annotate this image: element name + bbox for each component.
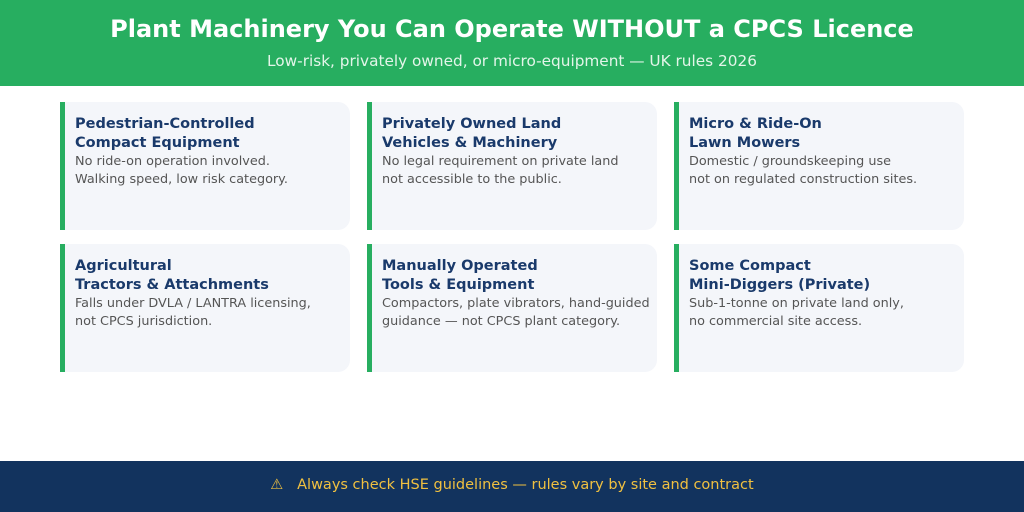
card: lawn mowers: Domestic / groundskeeping use bbox=[689, 154, 891, 169]
card: manual tools: Compactors, plate vibrators, hand-guided bbox=[382, 296, 650, 311]
card: privately owned land bbox=[367, 102, 657, 230]
card: lawn mowers: Lawn Mowers bbox=[689, 135, 800, 151]
card: lawn mowers: Micro & Ride-On bbox=[689, 116, 822, 132]
card: agricultural bbox=[60, 244, 350, 372]
card: agricultural: Agricultural bbox=[75, 258, 172, 274]
card: mini-diggers: Mini-Diggers (Private) bbox=[689, 277, 870, 293]
card: agricultural: Tractors & Attachments bbox=[75, 277, 269, 293]
card: pedestrian-controlled: Pedestrian-Controlled bbox=[75, 116, 255, 132]
card: pedestrian-controlled: No ride-on operation involved. bbox=[75, 154, 270, 169]
card: manual tools: guidance — not CPCS plant category. bbox=[382, 314, 620, 329]
card: privately owned land: No legal requirement on private land bbox=[382, 154, 618, 169]
card: lawn mowers: not on regulated construction sites. bbox=[689, 172, 917, 187]
card: agricultural: Falls under DVLA / LANTRA licensing, bbox=[75, 296, 311, 311]
header bbox=[0, 0, 1024, 86]
card: mini-diggers: Sub-1-tonne on private land only, bbox=[689, 296, 904, 311]
card: manual tools: Manually Operated bbox=[382, 258, 538, 274]
card: lawn mowers bbox=[674, 102, 964, 230]
card: mini-diggers: Some Compact bbox=[689, 258, 811, 274]
footer warning: ⚠ Always check HSE guidelines — rules vary by site and contract bbox=[270, 477, 754, 493]
footer warning bbox=[0, 461, 1024, 512]
card: pedestrian-controlled: Compact Equipment bbox=[75, 135, 240, 151]
subtitle: Low-risk, privately owned, or micro-equipment — UK rules 2026 bbox=[267, 52, 757, 70]
title: Plant Machinery You Can Operate WITHOUT a CPCS Licence bbox=[110, 15, 914, 43]
card: agricultural: not CPCS jurisdiction. bbox=[75, 314, 212, 329]
card: pedestrian-controlled bbox=[60, 102, 350, 230]
card: manual tools: Tools & Equipment bbox=[382, 277, 534, 293]
card: mini-diggers bbox=[674, 244, 964, 372]
card: pedestrian-controlled: Walking speed, low risk category. bbox=[75, 172, 288, 187]
card: mini-diggers: no commercial site access. bbox=[689, 314, 862, 329]
card: privately owned land: not accessible to the public. bbox=[382, 172, 562, 187]
card: privately owned land: Privately Owned Land bbox=[382, 116, 561, 132]
card: privately owned land: Vehicles & Machinery bbox=[382, 135, 557, 151]
card: manual tools bbox=[367, 244, 657, 372]
